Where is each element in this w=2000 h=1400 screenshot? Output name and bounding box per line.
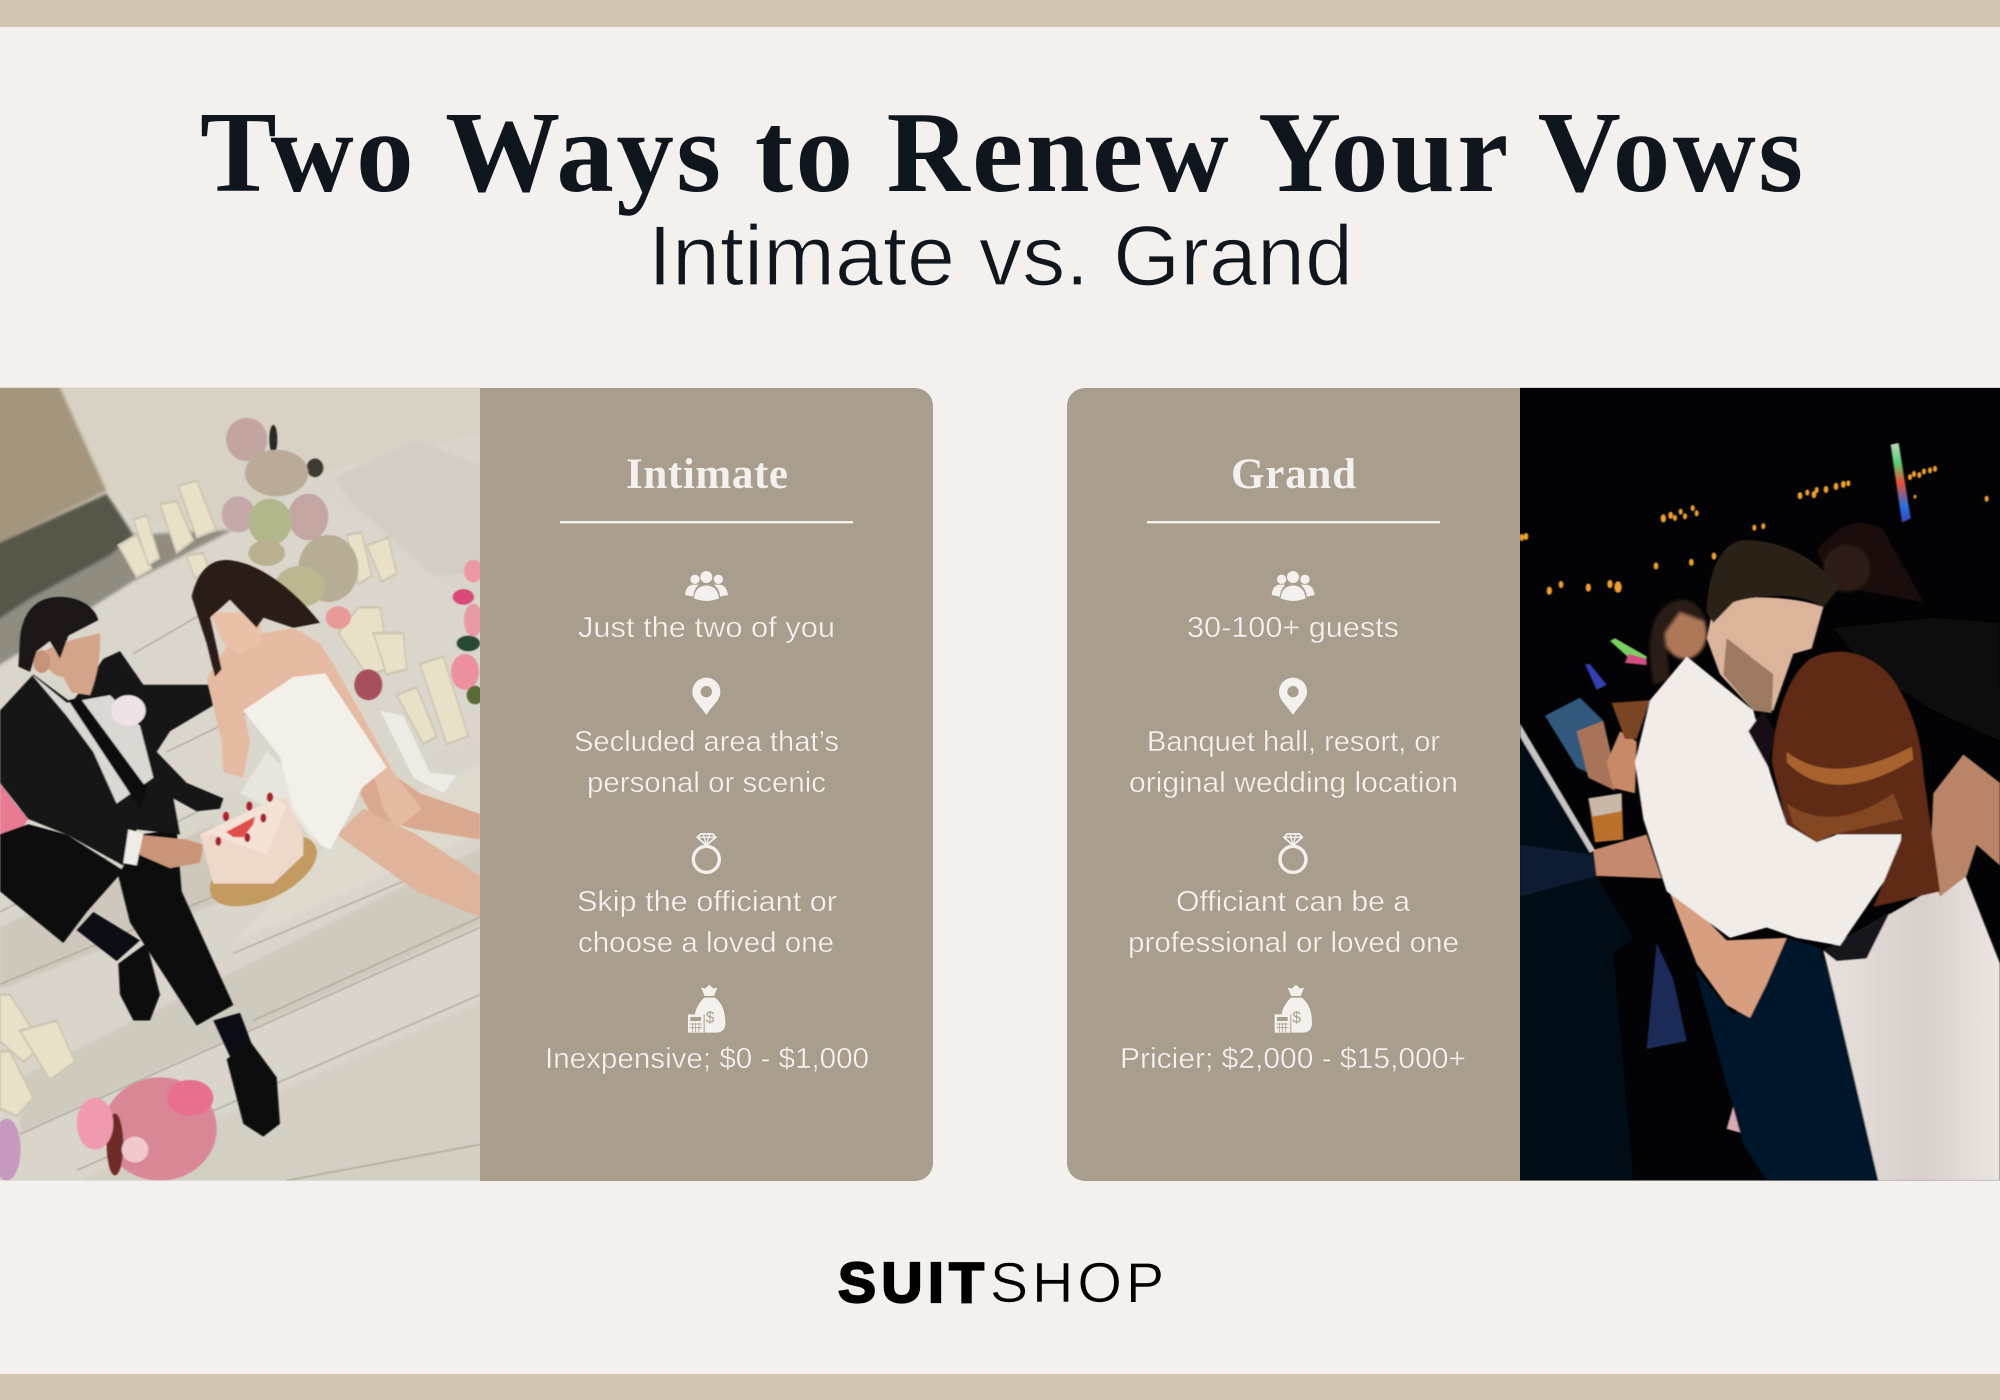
icon: people [685, 571, 728, 601]
panel background [480, 388, 933, 1181]
icon: money bag and calculator: $ [706, 1010, 715, 1027]
text: location: Secluded area that’s [574, 726, 839, 758]
cake [200, 792, 318, 907]
panel: intimate [480, 388, 933, 1181]
icon: money bag and calculator [688, 985, 725, 1033]
candles [0, 481, 468, 1116]
divider [560, 521, 853, 523]
subtitle: Intimate vs. Grand [648, 209, 1353, 304]
guest in navy [1520, 731, 1633, 1181]
text: location: original wedding location [1129, 767, 1458, 799]
icon: location pin [692, 678, 720, 715]
text: location [1129, 726, 1458, 799]
icon: money bag and calculator: $ [1292, 1010, 1301, 1027]
heading: Grand [1231, 451, 1356, 498]
text: location: Banquet hall, resort, or [1147, 726, 1441, 758]
bride [192, 560, 480, 917]
icon: money bag and calculator [1275, 985, 1312, 1033]
top band [0, 0, 2000, 27]
icon: location pin [1279, 678, 1307, 715]
string lights [1519, 466, 1989, 595]
logo [838, 1251, 1164, 1315]
text: guests: Just the two of you [578, 612, 835, 644]
text: officiant: Officiant can be a [1176, 886, 1410, 918]
text: officiant [577, 886, 838, 959]
bottom band [0, 1374, 2000, 1400]
text: officiant: choose a loved one [578, 927, 834, 959]
flowers [269, 425, 277, 454]
logo: SUIT [838, 1251, 984, 1315]
text: location: personal or scenic [587, 767, 826, 799]
photo: couple cutting cake on stone steps [0, 380, 487, 1186]
text: location [574, 726, 839, 799]
icon: ring [693, 834, 719, 872]
logo: SHOP [990, 1251, 1164, 1315]
icon: people [1272, 571, 1315, 601]
photo: couple kissing on a dance floor [1519, 388, 2000, 1181]
icon: ring [1280, 834, 1306, 872]
text: officiant: professional or loved one [1128, 927, 1459, 959]
heading: Intimate [626, 451, 788, 498]
divider [1147, 521, 1440, 523]
text: officiant: Skip the officiant or [577, 886, 838, 918]
text: cost: Pricier; $2,000 - $15,000+ [1120, 1043, 1466, 1075]
text: officiant [1128, 886, 1459, 959]
text: guests: 30-100+ guests [1187, 612, 1399, 644]
groom [0, 597, 280, 1137]
crowd [1650, 523, 2000, 742]
title: Two Ways to Renew Your Vows [200, 89, 1803, 216]
panel background [1067, 388, 1520, 1181]
panel: grand [1067, 388, 1520, 1181]
glow sticks [1585, 443, 1911, 690]
groom and bride [1727, 1082, 1763, 1139]
text: cost: Inexpensive; $0 - $1,000 [545, 1043, 869, 1075]
